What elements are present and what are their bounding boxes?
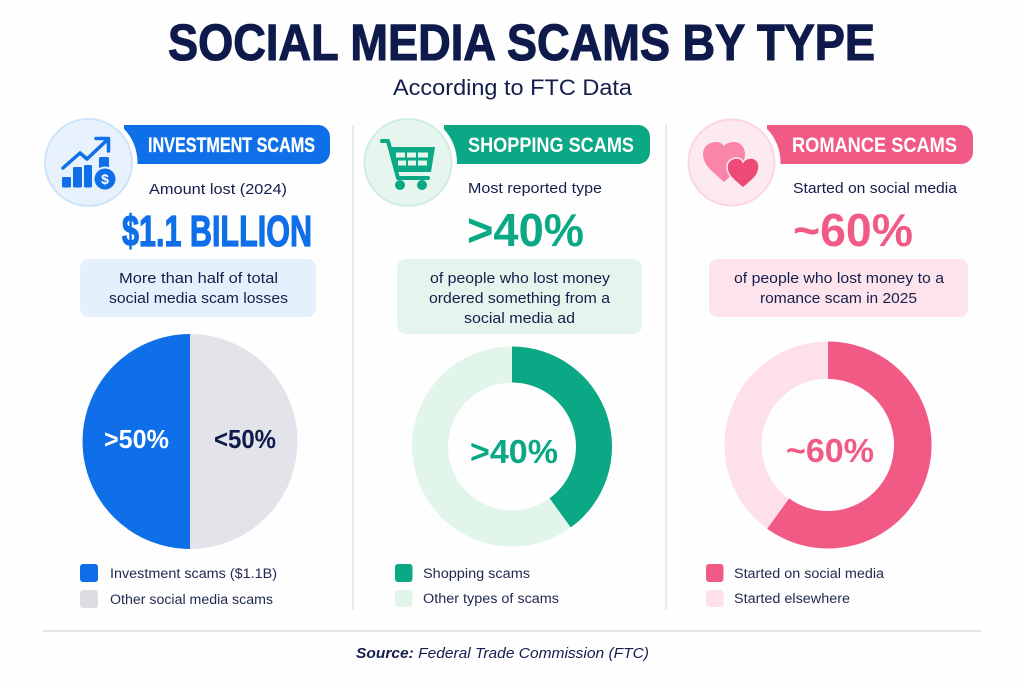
subtitle: According to FTC Data xyxy=(393,75,632,100)
big stat: $1.1 billion: $1.1 BILLION xyxy=(122,207,312,256)
callout: shopping: of people who lost money xyxy=(430,270,611,287)
callout: investment: social media scam losses xyxy=(109,290,288,307)
callout: shopping: ordered something from a xyxy=(429,290,611,307)
banner: investment scams: INVESTMENT SCAMS xyxy=(148,134,315,157)
legend: romance: Started elsewhere xyxy=(734,591,850,606)
banner: romance scams: ROMANCE SCAMS xyxy=(792,134,957,157)
label: most reported type: Most reported type xyxy=(468,180,602,197)
donut chart: romance share: ~60% xyxy=(786,432,874,469)
label: amount lost: Amount lost (2024) xyxy=(149,181,287,198)
callout: shopping xyxy=(397,259,642,334)
legend: investment: Investment scams ($1.1B) xyxy=(110,566,277,581)
legend: romance xyxy=(706,564,885,607)
banner: investment scams xyxy=(40,114,330,212)
pie chart: investment share xyxy=(83,334,297,549)
icon: rising chart with dollar coin: $ xyxy=(101,171,109,187)
legend: shopping: Shopping scams xyxy=(423,566,530,581)
big stat: over 40 percent: >40% xyxy=(467,204,584,256)
panel: romance scams xyxy=(682,114,973,607)
panel: investment scams xyxy=(40,114,330,608)
icon: two hearts xyxy=(688,120,774,206)
banner: shopping scams: SHOPPING SCAMS xyxy=(468,134,634,157)
legend: investment xyxy=(80,564,277,608)
legend: shopping xyxy=(395,564,559,607)
callout: investment xyxy=(80,259,316,317)
pie chart: investment share: <50% xyxy=(214,424,276,454)
legend: romance: Started on social media xyxy=(734,566,885,581)
big stat: about 60 percent: ~60% xyxy=(793,204,913,256)
pie chart: investment share: >50% xyxy=(104,424,169,454)
icon: shopping cart xyxy=(364,119,452,206)
donut chart: shopping share xyxy=(430,346,612,528)
legend: shopping: Other types of scams xyxy=(423,591,559,606)
callout: investment: More than half of total xyxy=(119,270,278,287)
legend: investment: Other social media scams xyxy=(110,592,273,607)
banner: romance scams xyxy=(682,114,973,212)
donut chart: romance share xyxy=(743,342,932,548)
callout: romance: of people who lost money to a xyxy=(734,270,945,287)
callout: romance: romance scam in 2025 xyxy=(760,290,917,307)
source line: Source: Federal Trade Commission (FTC) xyxy=(356,646,649,662)
title: SOCIAL MEDIA SCAMS BY TYPE xyxy=(168,14,875,71)
banner: shopping scams xyxy=(359,114,650,212)
callout: romance xyxy=(709,259,968,317)
callout: shopping: social media ad xyxy=(464,310,575,327)
panel: shopping scams xyxy=(359,114,650,607)
label: started on social media: Started on social media xyxy=(793,180,958,197)
donut chart: shopping share: >40% xyxy=(470,433,558,470)
icon: rising chart with dollar coin xyxy=(45,119,132,206)
